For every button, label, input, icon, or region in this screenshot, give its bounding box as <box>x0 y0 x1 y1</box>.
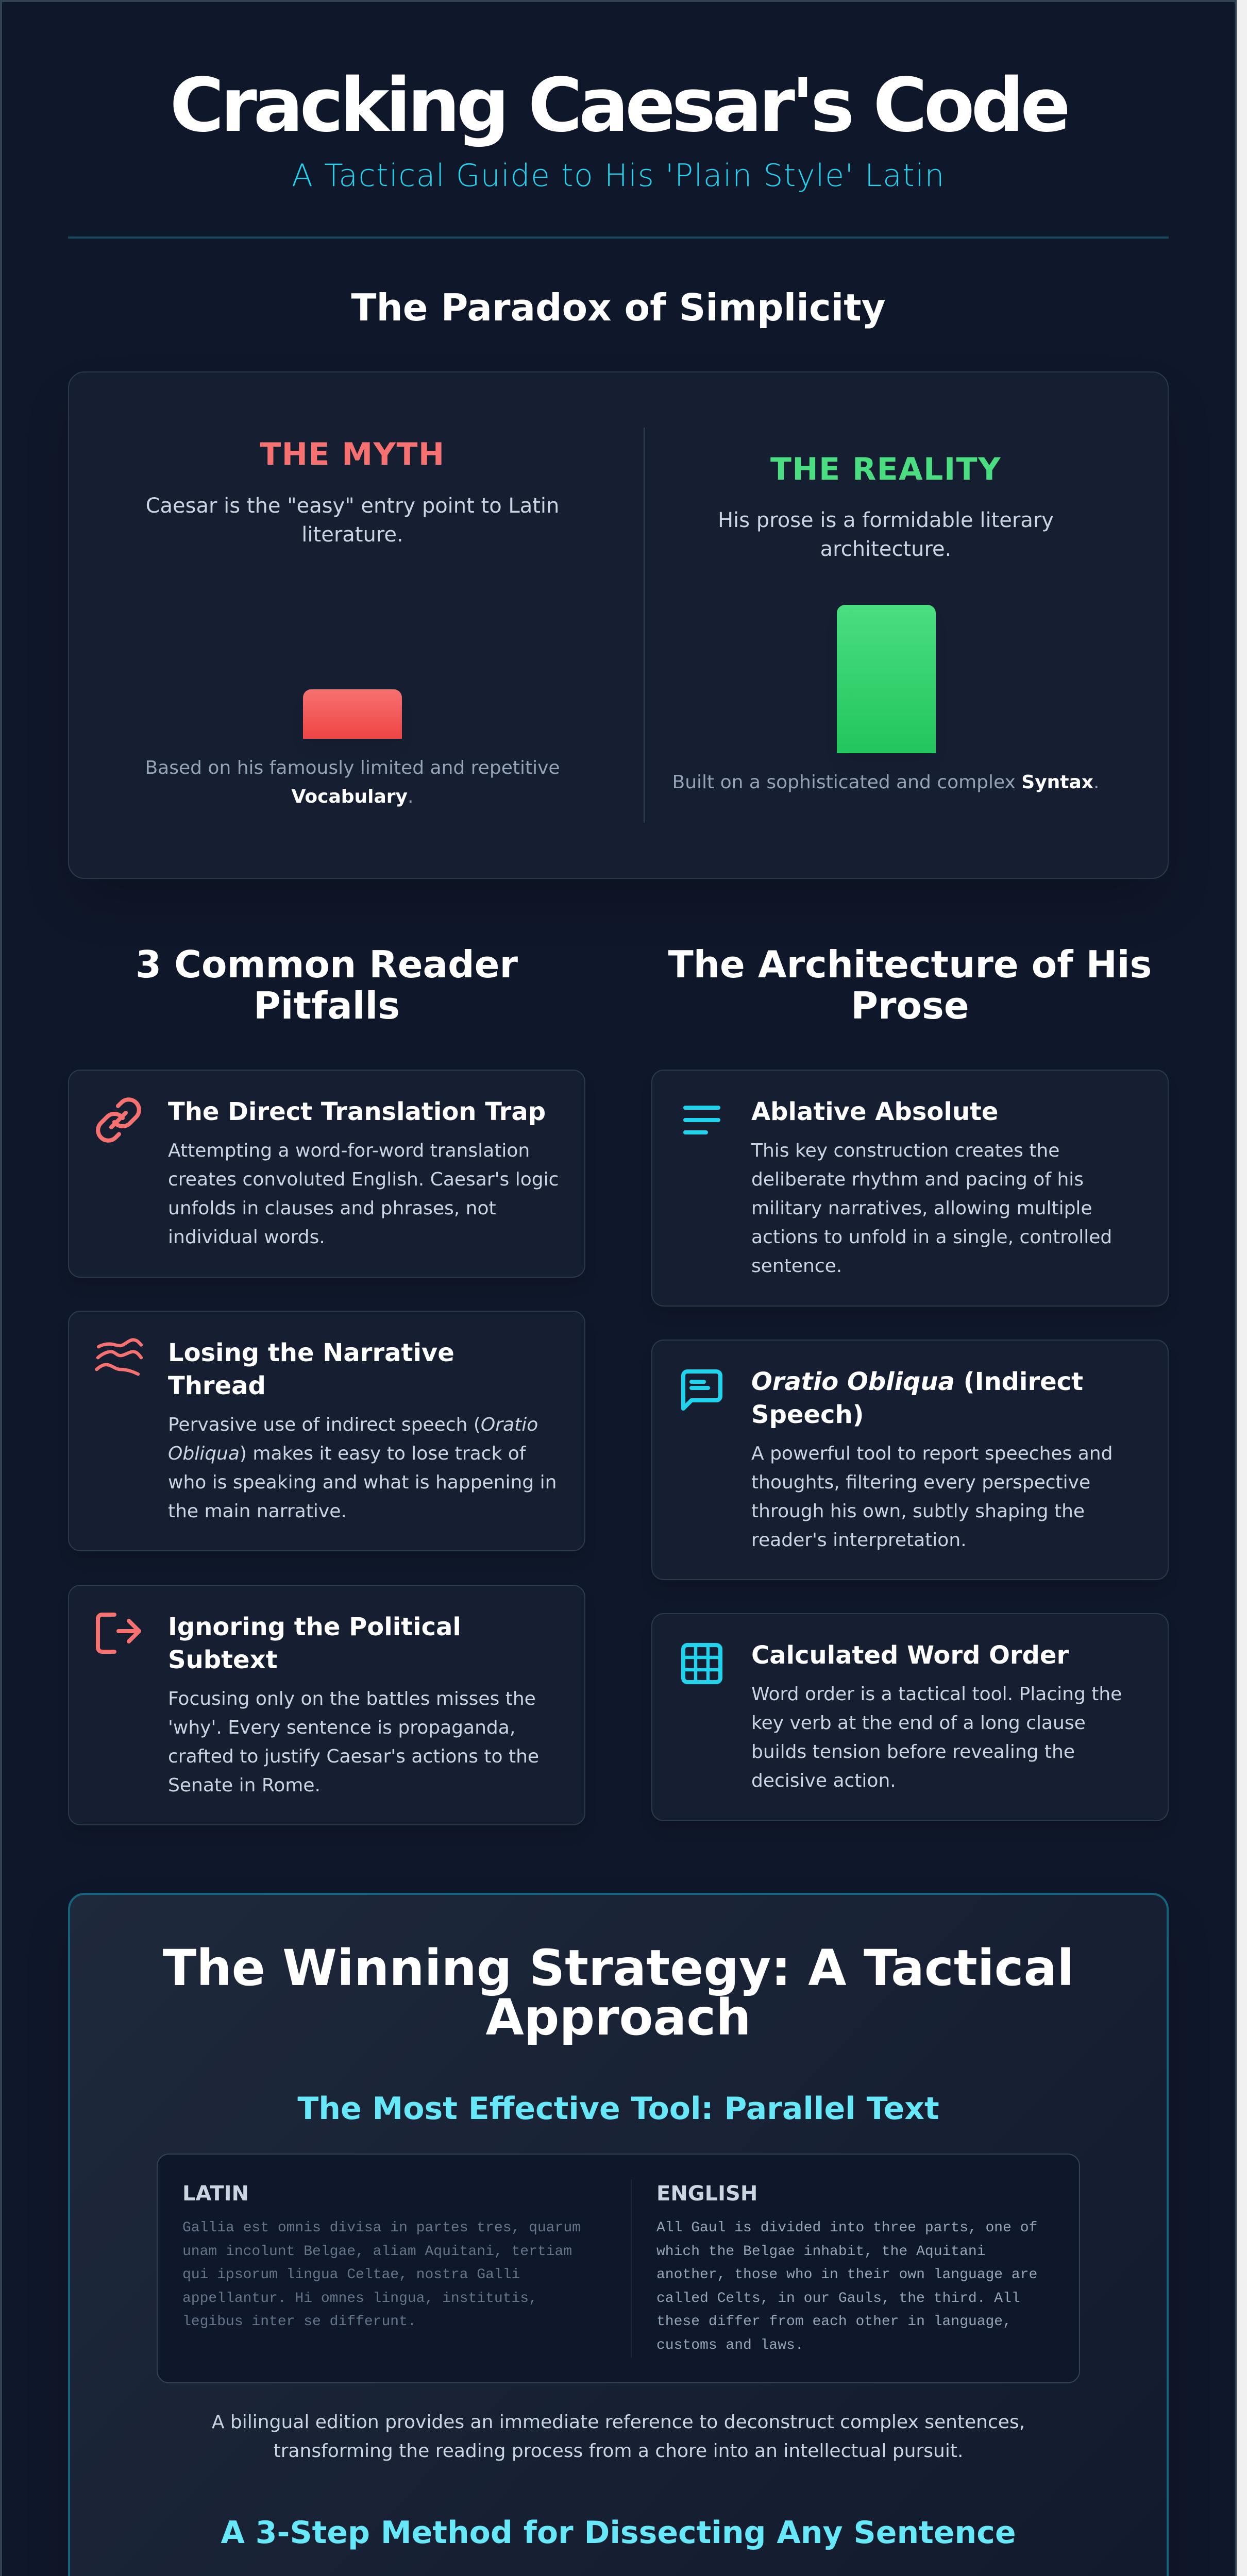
card text: through his own, subtly shaping the <box>751 1501 1085 1522</box>
heading: architecture: Prose <box>851 984 969 1027</box>
latin passage <box>182 2216 606 2334</box>
icon: text lines <box>677 1095 727 1145</box>
text: reality statement: His prose is a formidable literary <box>718 509 1054 532</box>
card text: who is speaking and what is happening in <box>168 1472 557 1493</box>
bar: vocabulary <box>303 689 402 739</box>
panel: the winning strategy <box>68 1893 1169 2576</box>
card text: creates convoluted English. Caesar's logic <box>168 1169 559 1190</box>
column: the reality <box>672 451 1099 793</box>
card title: Losing the Narrative <box>168 1338 454 1367</box>
text: bilingual edition note <box>70 2408 1167 2466</box>
card text <box>751 1439 1143 1555</box>
card text: Obliqua) makes it easy to lose track of <box>168 1443 526 1464</box>
card text: Word order is a tactical tool. Placing the <box>751 1684 1122 1705</box>
column: latin <box>182 2179 606 2358</box>
heading: pitfalls <box>136 943 518 1027</box>
heading: winning strategy: The Winning Strategy: A Tactical <box>163 1939 1074 1997</box>
latin passage: legibus inter se differunt. <box>182 2314 416 2330</box>
label: english: ENGLISH <box>656 2182 757 2206</box>
card: ablative absolute <box>651 1070 1169 1307</box>
card text <box>751 1680 1143 1795</box>
card text: crafted to justify Caesar's actions to the <box>168 1746 539 1767</box>
card: losing the narrative thread <box>68 1311 585 1551</box>
card text: sentence. <box>751 1256 842 1277</box>
header <box>170 62 1067 194</box>
heading: pitfalls: 3 Common Reader <box>136 943 518 986</box>
subheading: parallel text: The Most Effective Tool: Parallel Text <box>297 2091 939 2127</box>
card title: Oratio Obliqua (Indirect <box>751 1367 1083 1396</box>
card text: This key construction creates the <box>751 1140 1059 1161</box>
title: Cracking Caesar's Code <box>170 62 1067 148</box>
text: bilingual edition note: transforming the reading process from a chore into an intellectual pursuit. <box>274 2441 963 2462</box>
card text: reader's interpretation. <box>751 1530 967 1551</box>
card text: military narratives, allowing multiple <box>751 1198 1092 1219</box>
latin passage: qui ipsorum lingua Celtae, nostra Galli <box>182 2267 520 2283</box>
card text: unfolds in clauses and phrases, not <box>168 1198 496 1219</box>
panel: myth vs reality <box>68 371 1169 879</box>
english passage: called Celts, in our Gauls, the third. All <box>656 2291 1020 2306</box>
card text <box>168 1137 560 1252</box>
heading: winning strategy <box>70 1943 1167 2042</box>
card text: Pervasive use of indirect speech (Oratio <box>168 1414 538 1435</box>
caption: syntax: Built on a sophisticated and complex Syntax. <box>672 772 1099 793</box>
card text: decisive action. <box>751 1770 896 1791</box>
english passage: customs and laws. <box>656 2337 804 2353</box>
card title: Thread <box>168 1371 266 1400</box>
card: ignoring the political subtext <box>68 1585 585 1825</box>
caption: vocabulary: Based on his famously limited and repetitive <box>145 757 560 778</box>
icon: exit arrow <box>94 1611 143 1660</box>
text: myth statement: Caesar is the "easy" entry point to Latin <box>146 494 559 518</box>
latin passage: Gallia est omnis divisa in partes tres, quarum <box>182 2220 581 2236</box>
latin passage: unam incolunt Belgae, aliam Aquitani, tertiam <box>182 2243 572 2260</box>
caption: vocabulary: Vocabulary. <box>292 786 413 807</box>
card text <box>751 1137 1143 1281</box>
label: latin: LATIN <box>182 2182 249 2206</box>
card title: Calculated Word Order <box>751 1641 1069 1670</box>
card title <box>751 1365 1143 1431</box>
icon: chain link <box>94 1095 143 1145</box>
text: myth statement: literature. <box>301 523 403 547</box>
icon: speech bubble <box>677 1365 727 1415</box>
card text: Attempting a word-for-word translation <box>168 1140 530 1161</box>
card text <box>168 1411 560 1526</box>
english passage: these differ from each other in language, <box>656 2314 1012 2330</box>
card text: 'why'. Every sentence is propaganda, <box>168 1717 515 1738</box>
panel: parallel text table <box>157 2154 1080 2383</box>
card: oratio obliqua <box>651 1340 1169 1580</box>
english passage <box>656 2216 1054 2357</box>
card text: individual words. <box>168 1227 325 1248</box>
card text: Senate in Rome. <box>168 1775 321 1796</box>
bar: syntax <box>837 605 936 753</box>
card title <box>168 1611 560 1676</box>
card title: Speech) <box>751 1400 864 1429</box>
card text: key verb at the end of a long clause <box>751 1713 1086 1734</box>
card text <box>168 1685 560 1800</box>
heading: the paradox of simplicity: The Paradox of Simplicity <box>351 286 886 329</box>
heading: pitfalls: Pitfalls <box>254 984 400 1027</box>
card text: actions to unfold in a single, controlled <box>751 1227 1112 1248</box>
card text: builds tension before revealing the <box>751 1741 1075 1762</box>
caption: vocabulary <box>145 757 560 807</box>
card title: Ablative Absolute <box>751 1097 998 1126</box>
column: the myth <box>145 436 560 807</box>
subheading: three step method: A 3-Step Method for Dissecting Any Sentence <box>221 2515 1016 2551</box>
card text: Focusing only on the battles misses the <box>168 1688 536 1709</box>
card text: A powerful tool to report speeches and <box>751 1443 1113 1464</box>
text: reality statement <box>718 509 1054 561</box>
latin passage: appellantur. Hi omnes lingua, institutis, <box>182 2291 537 2306</box>
heading: architecture <box>651 944 1169 1026</box>
heading: the myth: THE MYTH <box>260 436 445 472</box>
card text: deliberate rhythm and pacing of his <box>751 1169 1084 1190</box>
card: calculated word order <box>651 1613 1169 1821</box>
heading: the reality: THE REALITY <box>770 451 1001 487</box>
text: bilingual edition note: A bilingual edition provides an immediate reference to deconstruct complex sentences, <box>212 2412 1025 2433</box>
english passage: All Gaul is divided into three parts, one of <box>656 2220 1037 2236</box>
icon: grid <box>677 1639 727 1688</box>
heading: architecture: The Architecture of His <box>668 943 1152 986</box>
heading: winning strategy: Approach <box>485 1989 751 2046</box>
column: english <box>656 2179 1054 2358</box>
english passage: another, those who in their own language are <box>656 2267 1037 2283</box>
card text: the main narrative. <box>168 1501 347 1522</box>
column: architecture of his prose <box>651 944 1169 1826</box>
card text: thoughts, filtering every perspective <box>751 1472 1090 1493</box>
english passage: which the Belgae inhabit, the Aquitani <box>656 2243 986 2260</box>
text: myth statement <box>146 494 559 547</box>
card title: The Direct Translation Trap <box>168 1097 546 1126</box>
text: reality statement: architecture. <box>820 537 951 561</box>
column: reader pitfalls <box>68 943 585 1825</box>
card title: Subtext <box>168 1646 278 1674</box>
card title <box>168 1336 560 1402</box>
subtitle: A Tactical Guide to His 'Plain Style' Latin <box>292 158 945 194</box>
icon: waves <box>94 1336 143 1386</box>
card title: Ignoring the Political <box>168 1613 461 1641</box>
card: direct translation trap <box>68 1070 585 1278</box>
